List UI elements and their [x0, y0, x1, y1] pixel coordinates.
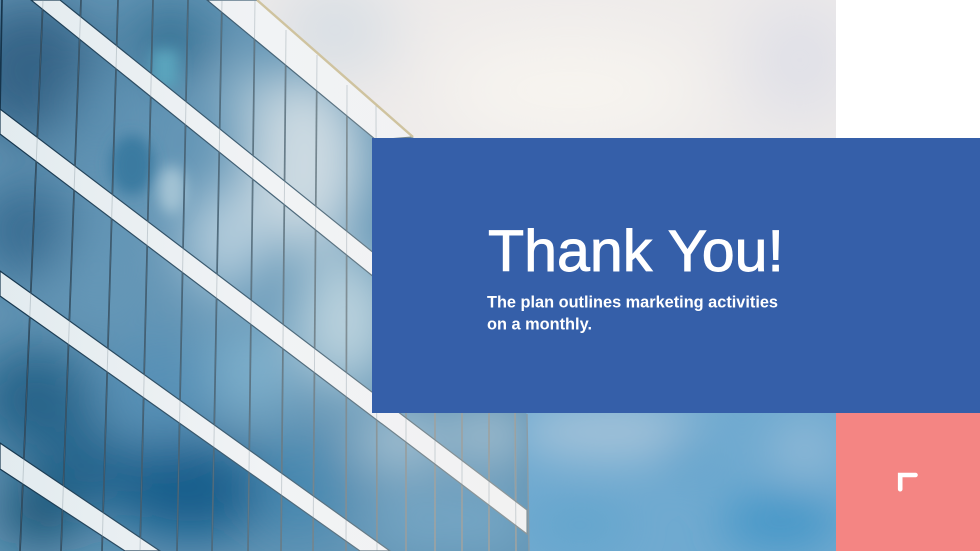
white floor bands — [0, 0, 527, 551]
building parapet edge — [257, 0, 413, 137]
building right edge — [527, 414, 529, 551]
body text — [487, 294, 778, 334]
photo: lower blue sky — [526, 413, 836, 551]
heading: Thank You! — [488, 219, 784, 284]
building glass reflections — [0, 0, 530, 551]
icon: white corner bracket — [900, 475, 916, 489]
body text: on a monthly. — [487, 316, 592, 334]
panel: blue thank-you card — [372, 138, 980, 413]
mullion seams over bands — [20, 0, 516, 551]
panel: coral corner block — [836, 413, 980, 551]
window mullions — [0, 0, 516, 551]
photo: glass office building — [0, 0, 530, 551]
photo: upper cloudy sky — [257, 0, 850, 140]
body text: The plan outlines marketing activities — [487, 294, 778, 312]
